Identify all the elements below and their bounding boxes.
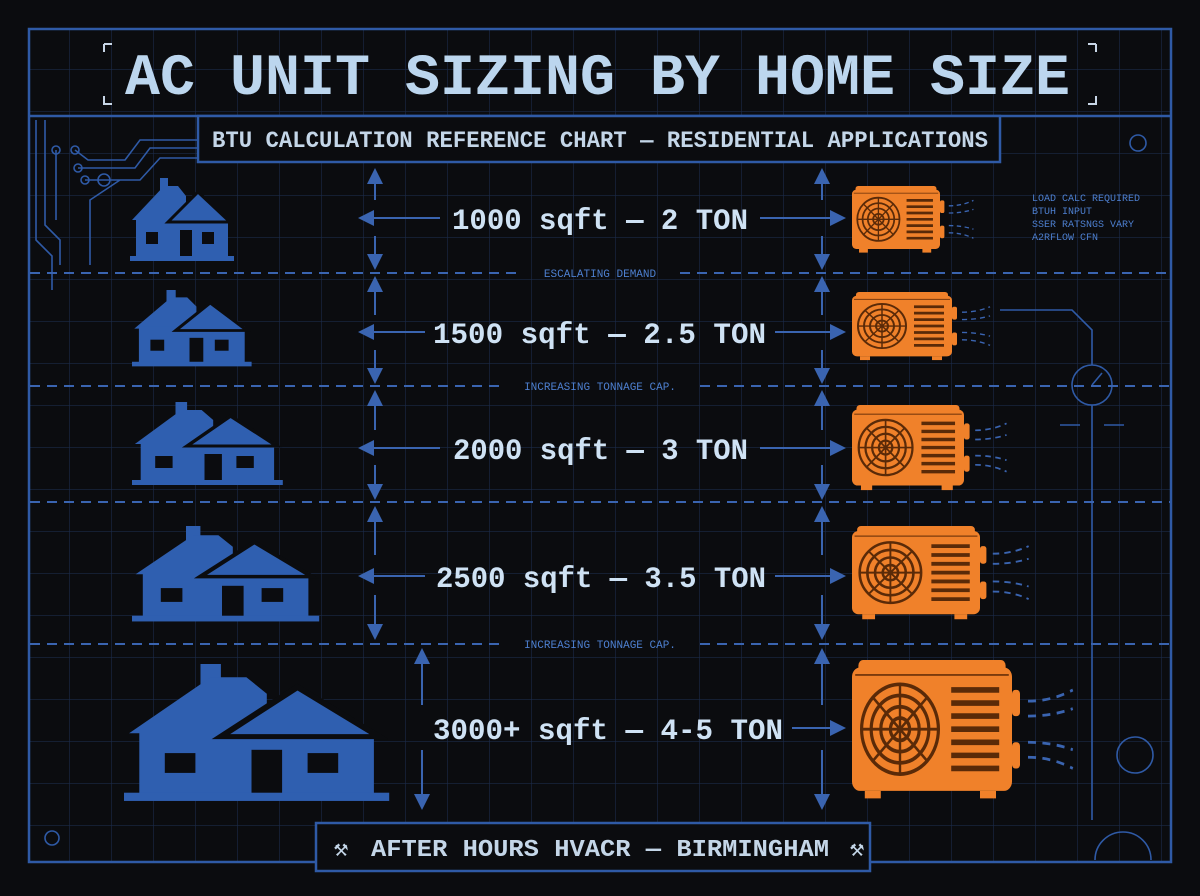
row 2 [132, 290, 990, 366]
vertical dimension arrows [375, 172, 822, 806]
row 3 [132, 402, 1007, 490]
row 4: 2500 sqft — 3.5 TON [436, 563, 766, 597]
subtitle box [198, 116, 1000, 162]
separator labels: ESCALATING DEMAND [544, 269, 657, 281]
footer box: ⚒ [850, 837, 864, 864]
note: load calc: A2RFLOW CFN [1032, 233, 1098, 244]
note: load calc: BTUH INPUT [1032, 207, 1092, 218]
note: load calc [1032, 194, 1140, 244]
note: load calc: SSER RATSNGS VARY [1032, 220, 1134, 231]
subtitle box: BTU CALCULATION REFERENCE CHART — RESIDENTIAL APPLICATIONS [212, 128, 988, 154]
arrow left [362, 217, 440, 219]
separator labels [524, 269, 676, 652]
circuit decorations [36, 120, 1153, 860]
note: load calc: LOAD CALC REQUIRED [1032, 194, 1140, 205]
row 3: 2000 sqft — 3 TON [453, 435, 748, 469]
row 5: 3000+ sqft — 4-5 TON [433, 715, 783, 749]
footer box [316, 823, 870, 871]
title: AC UNIT SIZING BY HOME SIZE [125, 47, 1070, 112]
footer box: ⚒ [334, 837, 348, 864]
dashed separators [30, 273, 1170, 644]
row 1: 1000 sqft — 2 TON [452, 205, 748, 239]
row 2: 1500 sqft — 2.5 TON [433, 319, 766, 353]
icon: ac unit [852, 186, 973, 253]
footer box: AFTER HOURS HVACR — BIRMINGHAM [371, 837, 829, 864]
separator labels: INCREASING TONNAGE CAP. [524, 640, 676, 652]
row 1 [130, 178, 973, 261]
arrow right [760, 217, 842, 219]
row 4 [132, 526, 1029, 621]
separator labels: INCREASING TONNAGE CAP. [524, 382, 676, 394]
row 5 [124, 660, 1073, 801]
icon: small house [130, 178, 234, 261]
